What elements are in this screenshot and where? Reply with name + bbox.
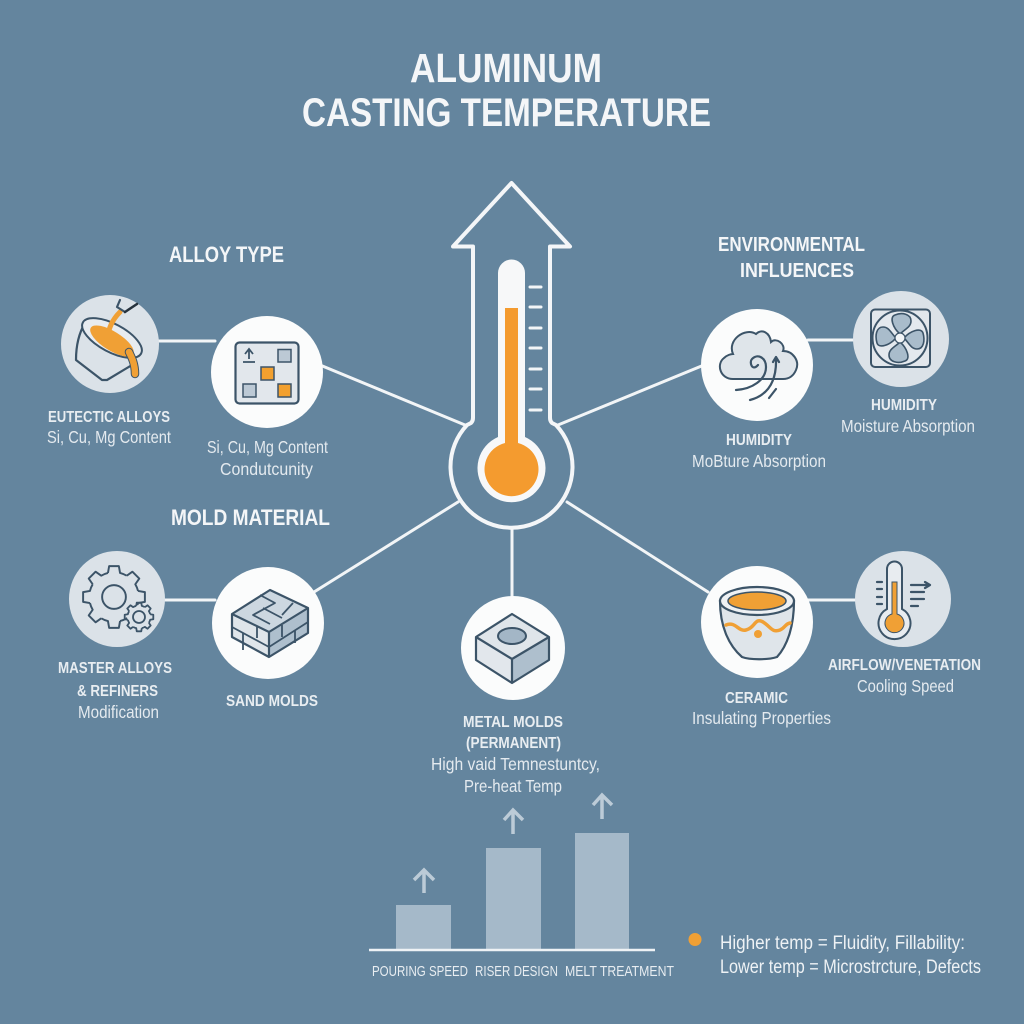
- thermometer tube and bulb: [477, 260, 546, 502]
- label: Condutcunity: [220, 459, 313, 479]
- label: (PERMANENT): [466, 735, 561, 752]
- label: [828, 657, 981, 696]
- title: ALUMINUM: [410, 45, 602, 91]
- bar chart: [369, 795, 674, 980]
- heading: environmental influences: INFLUENCES: [740, 260, 854, 282]
- label: [841, 397, 975, 436]
- node: si cu mg content: [207, 316, 328, 479]
- icon: cloud and swirl: [701, 309, 813, 421]
- label: & REFINERS: [77, 683, 158, 700]
- icon: ceramic crucible: [701, 566, 813, 678]
- label: [692, 690, 831, 728]
- label: SAND MOLDS: [226, 693, 318, 710]
- node: eutectic alloys: [47, 295, 171, 447]
- label: [431, 714, 600, 796]
- heading: alloy type: ALLOY TYPE: [169, 242, 284, 267]
- heading: mold material: MOLD MATERIAL: [171, 505, 330, 530]
- bar: melt treatment: MELT TREATMENT: [565, 963, 674, 980]
- label: HUMIDITY: [726, 432, 792, 449]
- chart baseline: [369, 949, 655, 951]
- scale ticks: [530, 287, 541, 410]
- icon: orange dot: [688, 933, 702, 946]
- legend: [688, 933, 981, 978]
- bar: riser design: [475, 810, 558, 980]
- label: [207, 437, 328, 479]
- arrow outline: [450, 183, 572, 528]
- legend text: Higher temp = Fluidity, Fillability:: [720, 933, 965, 954]
- label: HUMIDITY: [871, 397, 937, 414]
- label: CERAMIC: [725, 690, 788, 707]
- icon: metal block: [461, 596, 565, 700]
- icon: thermometer with airflow: [855, 551, 951, 647]
- icon: composition grid: [211, 316, 323, 428]
- label: Si, Cu, Mg Content: [47, 427, 171, 447]
- icon: crucible pouring: [61, 295, 159, 393]
- label: EUTECTIC ALLOYS: [48, 409, 170, 426]
- icon: gears: [69, 551, 165, 647]
- label: MoBture Absorption: [692, 451, 826, 471]
- label: [692, 432, 826, 471]
- label: Cooling Speed: [857, 676, 954, 696]
- heading: environmental influences: [718, 234, 865, 282]
- mercury: [484, 308, 538, 496]
- node: humidity (fan): [841, 291, 975, 436]
- icon: ventilation fan: [853, 291, 949, 387]
- label: METAL MOLDS: [463, 714, 563, 731]
- label: AIRFLOW/VENETATION: [828, 657, 981, 674]
- connector lines: [158, 340, 857, 600]
- label: [47, 409, 171, 447]
- label: [58, 660, 172, 722]
- bar: pouring speed: [372, 870, 468, 980]
- central thermometer arrow: [450, 183, 572, 528]
- legend text: [720, 933, 981, 978]
- bar: riser design: RISER DESIGN: [475, 963, 558, 980]
- heading: environmental influences: ENVIRONMENTAL: [718, 234, 865, 256]
- title: CASTING TEMPERATURE: [302, 91, 711, 135]
- bar: melt treatment: [565, 795, 674, 980]
- bar: pouring speed: POURING SPEED: [372, 963, 468, 980]
- node: master alloys and refiners: [58, 551, 172, 722]
- node: metal molds: [431, 596, 600, 796]
- label: High vaid Temnestuntcy,: [431, 754, 600, 774]
- legend text: Lower temp = Microstrcture, Defects: [720, 957, 981, 978]
- label: Insulating Properties: [692, 708, 831, 728]
- label: Pre-heat Temp: [464, 776, 562, 796]
- title: [302, 45, 711, 135]
- icon: brick block: [212, 567, 324, 679]
- label: Si, Cu, Mg Content: [207, 437, 328, 457]
- node: ceramic: [692, 566, 831, 728]
- node: airflow ventilation: [828, 551, 981, 696]
- label: Modification: [78, 702, 159, 722]
- node: humidity (cloud): [692, 309, 826, 471]
- label: MASTER ALLOYS: [58, 660, 172, 677]
- label: Moisture Absorption: [841, 416, 975, 436]
- node: sand molds: [212, 567, 324, 710]
